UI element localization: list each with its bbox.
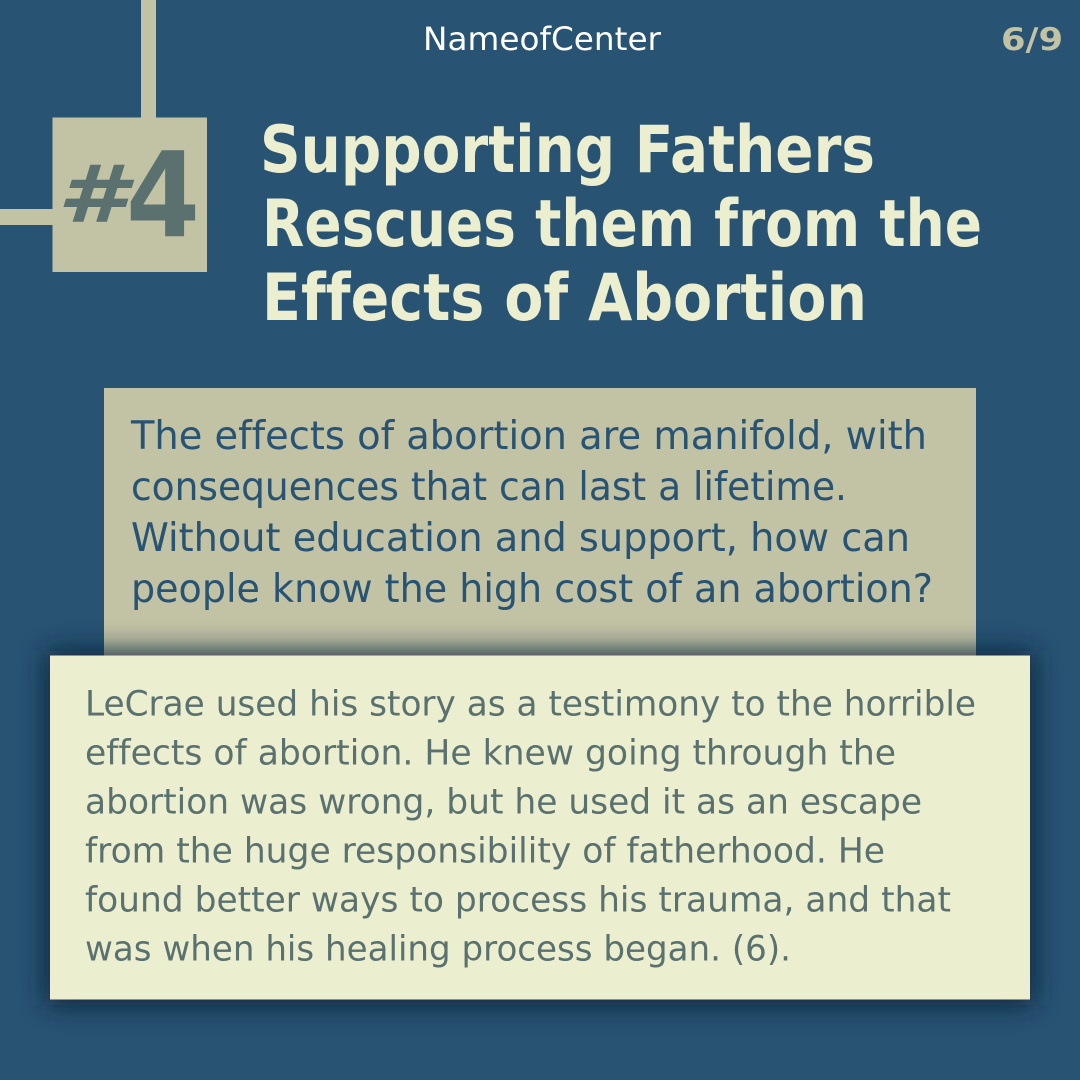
title: Effects of Abortion bbox=[262, 261, 867, 336]
panel: testimony text: found better ways to process his trauma, and that bbox=[85, 880, 951, 920]
panel: intro text: The effects of abortion are manifold, with bbox=[130, 414, 927, 459]
panel: intro text: Without education and support, how can bbox=[131, 516, 910, 561]
title bbox=[260, 113, 982, 336]
panel: intro text: consequences that can last a lifetime. bbox=[131, 465, 847, 510]
panel: testimony text: effects of abortion. He knew going through the bbox=[85, 734, 896, 774]
panel: testimony text: abortion was wrong, but he used it as an escape bbox=[85, 782, 922, 822]
badge label: #4: 4 bbox=[126, 126, 200, 264]
number badge with connector lines bbox=[0, 0, 207, 272]
panel shadow bbox=[46, 651, 1034, 1005]
panel: intro text bbox=[104, 388, 976, 668]
header: center name: NameofCenter bbox=[423, 20, 662, 58]
page number: 6/9 bbox=[1001, 22, 1063, 58]
title: Supporting Fathers bbox=[260, 113, 875, 188]
panel: testimony text: LeCrae used his story as a testimony to the horrible bbox=[85, 684, 976, 724]
panel: testimony text bbox=[50, 656, 1030, 1000]
panel: testimony text: from the huge responsibility of fatherhood. He bbox=[85, 832, 885, 872]
badge label: #4: # bbox=[57, 149, 135, 241]
panel: intro text: people know the high cost of an abortion? bbox=[131, 567, 933, 612]
badge label: #4 bbox=[57, 126, 200, 264]
panel: testimony text: was when his healing process began. (6). bbox=[85, 930, 791, 970]
